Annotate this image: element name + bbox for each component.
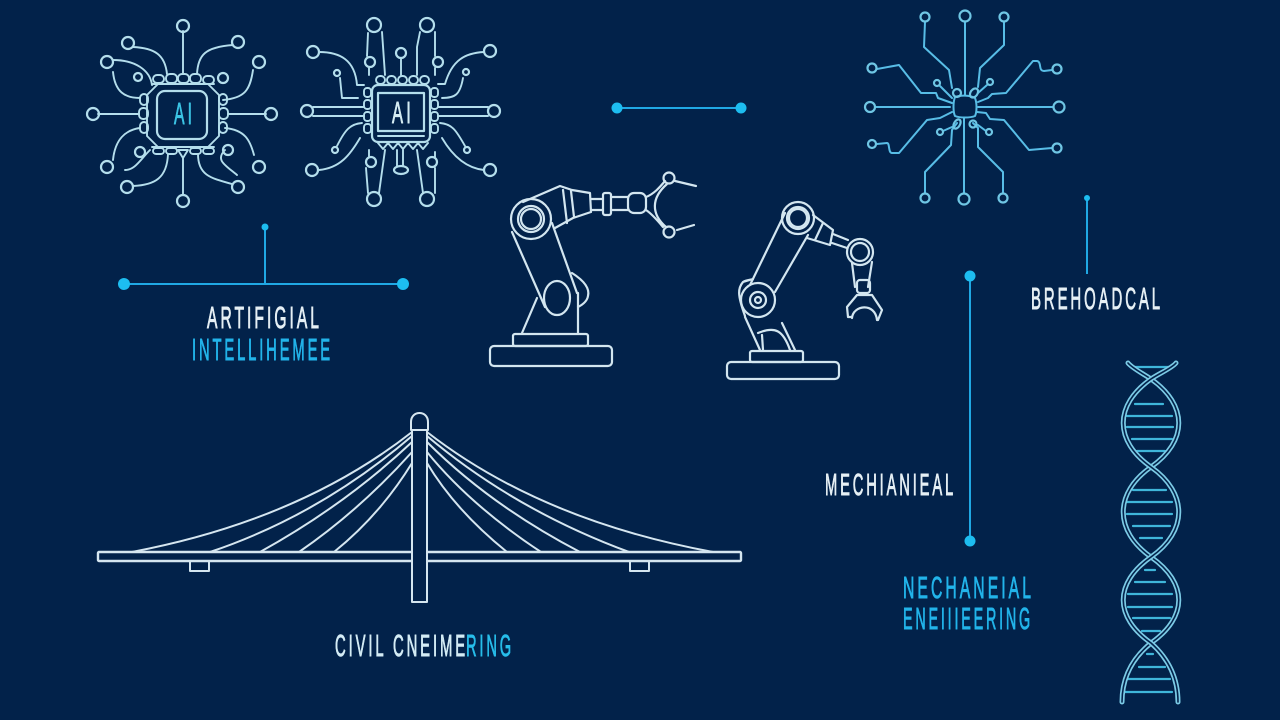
- icon: cable-stayed bridge: [98, 413, 741, 602]
- heading: civil engineering: CIVIL CNEIME: [335, 628, 468, 663]
- upper arm and gripper: [523, 186, 591, 228]
- icon: AI chip circuit (square): [301, 18, 500, 206]
- strand B: [1123, 363, 1179, 702]
- chip body: [364, 76, 438, 149]
- connector: mechanical: [964, 270, 976, 546]
- hub: [954, 96, 976, 118]
- infographic canvas: INTELLIHEMEE: [192, 332, 333, 367]
- heading: civil engineering: [335, 628, 514, 663]
- lower arm: [750, 213, 808, 292]
- chip body: [139, 74, 228, 158]
- icon: DNA helix: [1122, 363, 1179, 702]
- tower: [412, 430, 427, 602]
- forearm: [807, 215, 848, 248]
- infographic canvas: ENEIIIEERING: [903, 601, 1033, 636]
- connector: top centre line: [612, 102, 746, 114]
- icon: AI chip circuit (octagonal): [87, 20, 277, 207]
- circuit traces: [98, 31, 266, 195]
- gripper: [852, 262, 872, 287]
- shoulder joint: [511, 199, 551, 239]
- icon: robot arm left: [490, 172, 696, 366]
- icon: robot arm right: [727, 202, 882, 379]
- heading: artificial intelligence: ARTIFIGIAL: [207, 300, 322, 335]
- piers: [190, 561, 649, 571]
- base: [727, 362, 839, 379]
- lower arm: [512, 223, 577, 307]
- heading: mechanical engineering: [903, 570, 1034, 636]
- connector: biomedical: [1084, 195, 1090, 274]
- chip label AI: AI: [392, 95, 414, 130]
- infographic canvas: RING: [466, 628, 514, 663]
- circuit nodes: [301, 18, 500, 206]
- icon: circuit network: [865, 10, 1064, 204]
- circuit traces: [313, 32, 488, 193]
- connector: artificial intelligence: [118, 224, 409, 290]
- chip label AI: AI: [174, 96, 195, 131]
- base: [490, 346, 612, 366]
- nodes: [865, 10, 1064, 204]
- circuit nodes: [87, 20, 277, 207]
- rungs: [1125, 367, 1173, 692]
- joints: [741, 283, 775, 317]
- heading: mechanical engineering: NECHANEIAL: [903, 570, 1034, 605]
- heading: artificial intelligence: [192, 300, 333, 367]
- deck: [98, 552, 741, 561]
- strand A: [1122, 363, 1179, 702]
- cables: [132, 432, 412, 552]
- infographic canvas: MECHIANIEAL: [825, 467, 956, 502]
- traces: [875, 22, 1053, 193]
